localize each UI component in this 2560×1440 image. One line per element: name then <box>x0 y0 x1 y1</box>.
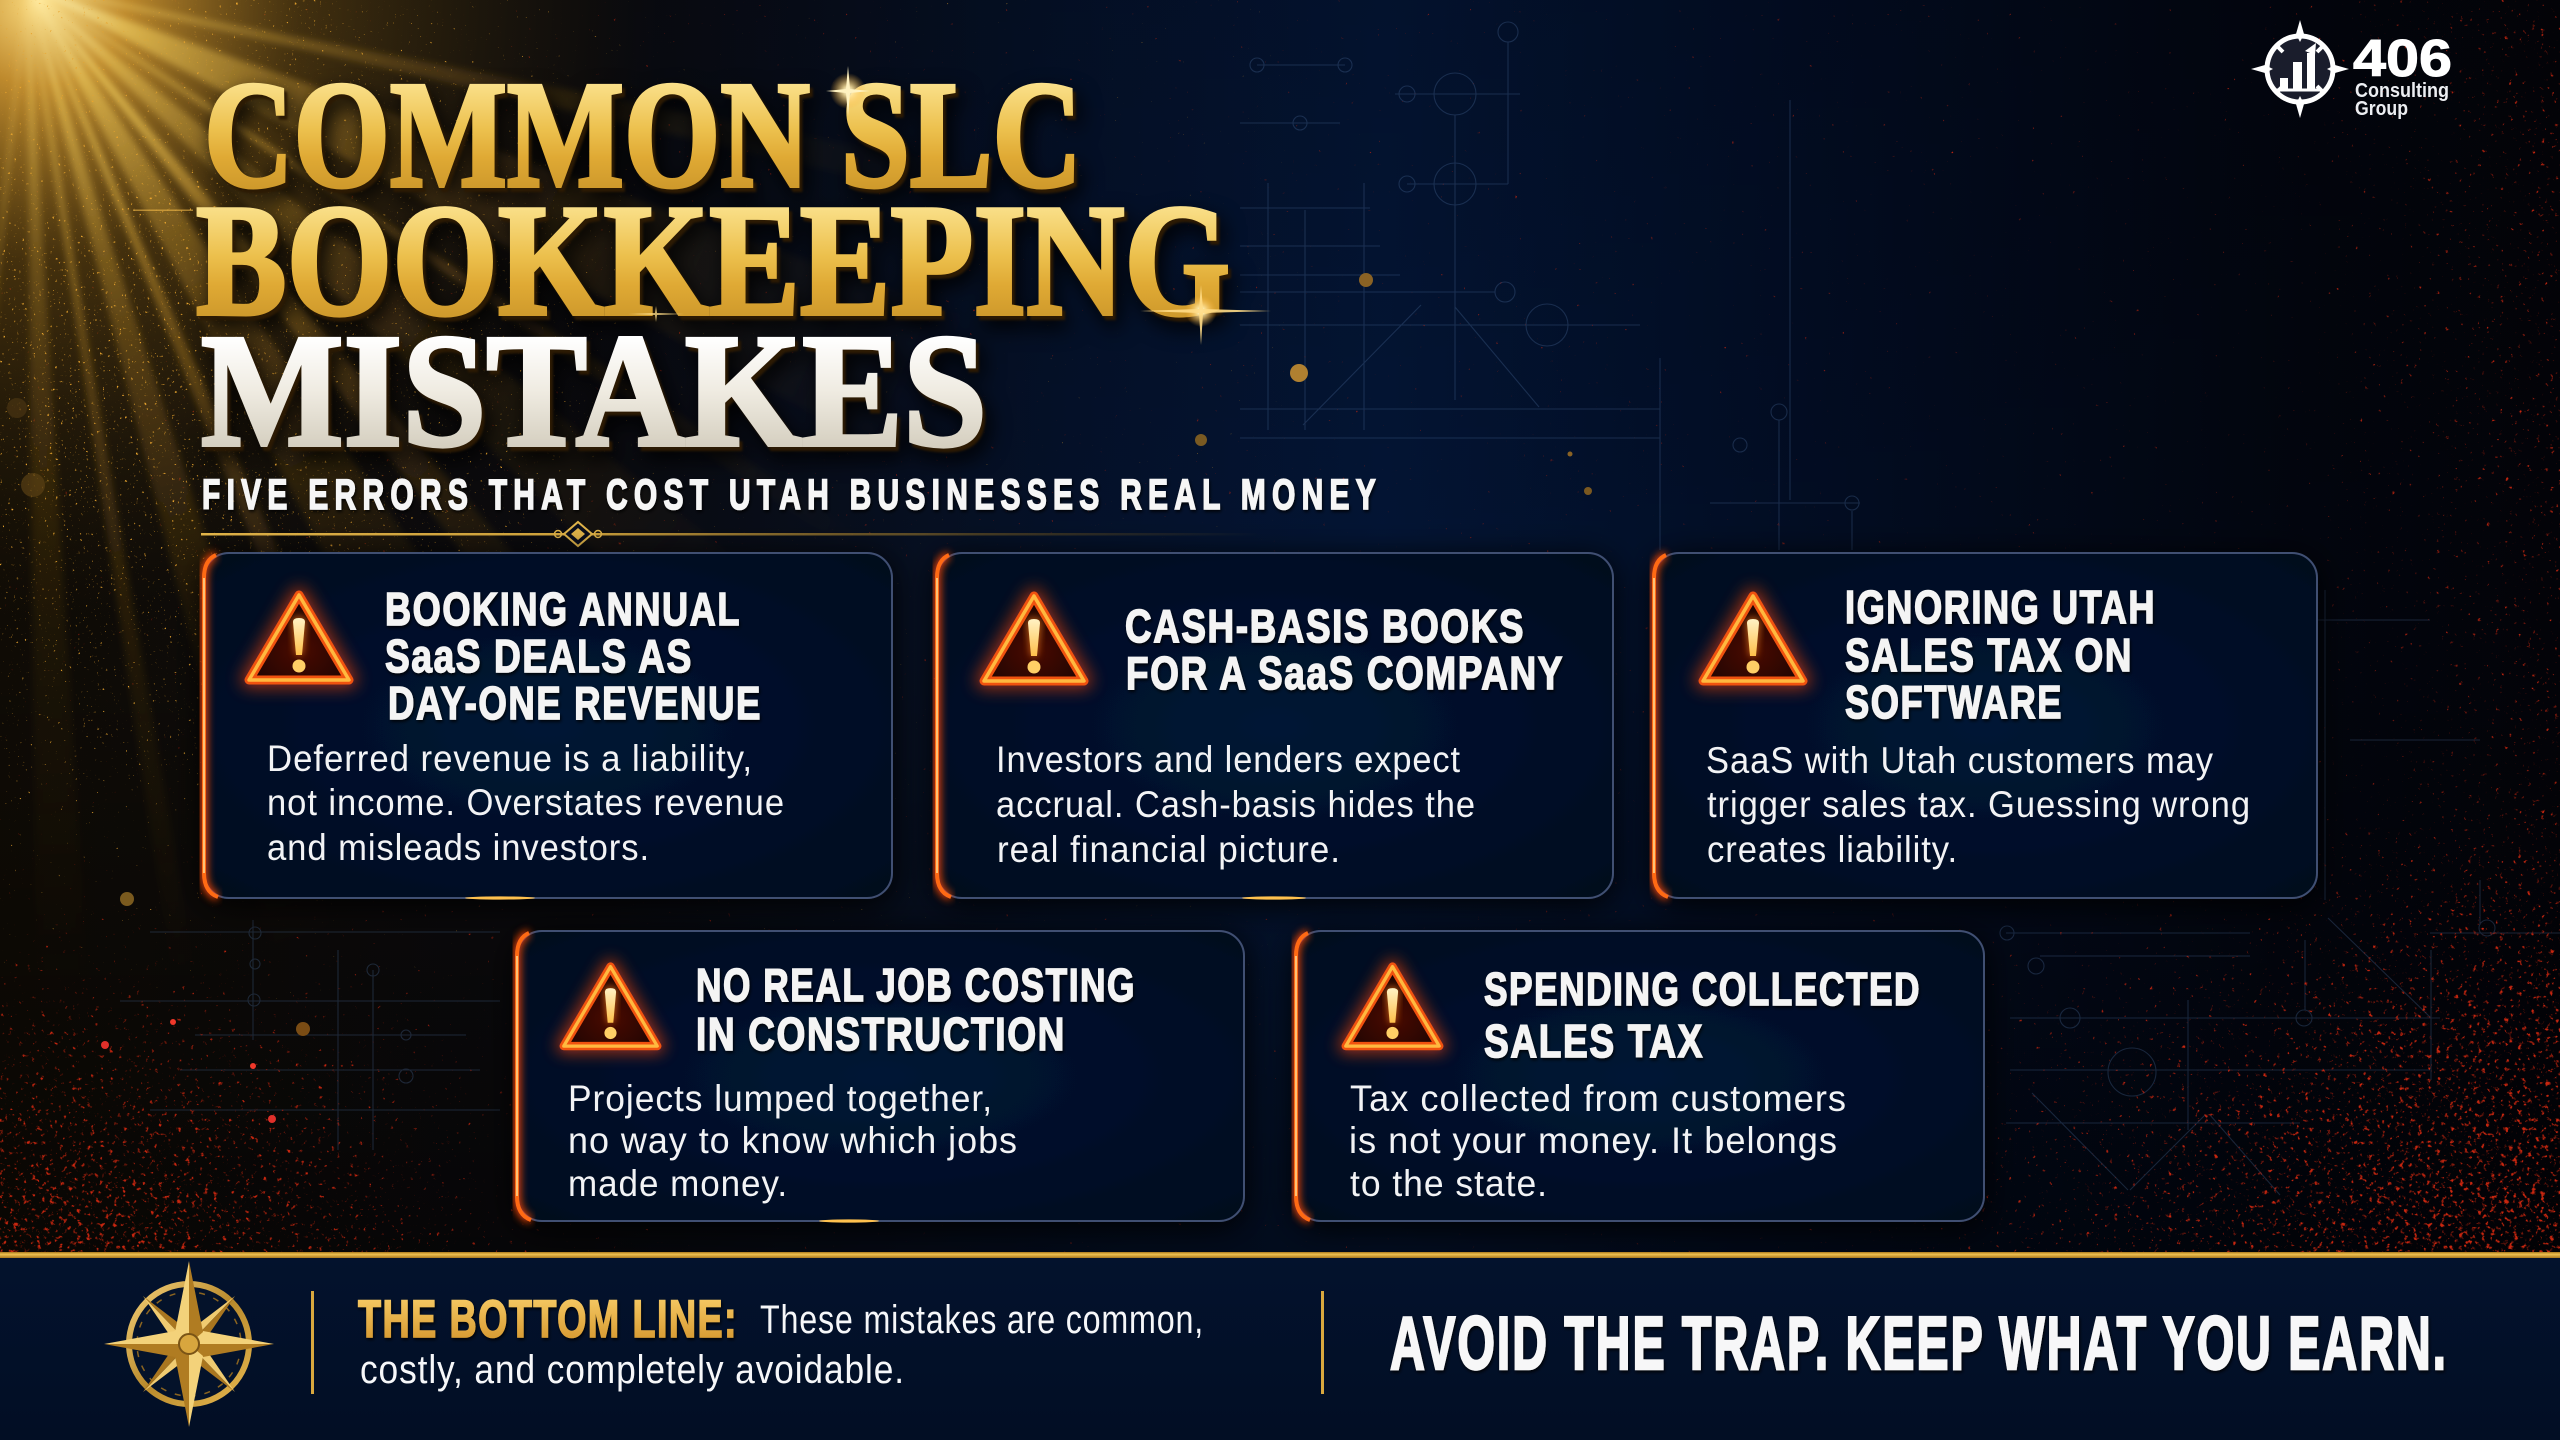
body text: to the state. <box>1350 1163 1548 1204</box>
heading: SPENDING COLLECTED <box>1484 963 1921 1015</box>
title: MISTAKES <box>201 302 987 481</box>
body text: not income. Overstates revenue <box>267 782 785 823</box>
heading <box>385 583 762 729</box>
bottom line text <box>358 1290 1204 1392</box>
bottom banner <box>0 1252 2560 1440</box>
gold coin bokeh dots <box>7 273 1592 1123</box>
heading: NO REAL JOB COSTING <box>696 959 1136 1011</box>
body text <box>1706 740 2251 870</box>
title: COMMON SLC <box>204 51 1082 220</box>
panel: spending collected sales tax <box>1296 931 1984 1221</box>
title sparkles <box>133 66 1272 345</box>
subtitle ornament divider <box>201 522 1261 546</box>
body text: creates liability. <box>1707 829 1958 870</box>
subtitle: FIVE ERRORS THAT COST UTAH BUSINESSES REAL MONEY <box>202 471 1382 519</box>
heading <box>1484 963 1921 1067</box>
body text: Tax collected from customers <box>1350 1078 1847 1119</box>
body text: is not your money. It belongs <box>1349 1120 1838 1161</box>
body text <box>568 1078 1018 1204</box>
icon: warning triangle <box>564 967 657 1046</box>
logo: 406 Consulting Group <box>2251 20 2452 120</box>
body text <box>267 738 785 868</box>
logo: 406 Consulting Group: Group <box>2355 98 2408 120</box>
bottom line text: These mistakes are common, <box>760 1298 1204 1342</box>
panel: ignoring Utah sales tax <box>1654 553 2317 898</box>
heading: SALES TAX ON <box>1845 629 2133 681</box>
heading: IGNORING UTAH <box>1845 581 2156 633</box>
heading: FOR A SaaS COMPANY <box>1126 647 1564 699</box>
icon: warning triangle <box>1346 967 1439 1046</box>
body text: Projects lumped together, <box>568 1078 993 1119</box>
body text <box>996 739 1476 870</box>
panel: booking annual SaaS deals <box>204 553 892 900</box>
bottom line text: THE BOTTOM LINE: <box>358 1290 738 1349</box>
body text: made money. <box>568 1163 788 1204</box>
golden light rays top left <box>0 0 1300 1000</box>
heading: SALES TAX <box>1484 1015 1704 1067</box>
body text: SaaS with Utah customers may <box>1706 740 2214 781</box>
panel: cash-basis books <box>937 553 1613 900</box>
title: BOOKKEEPING <box>196 171 1230 349</box>
logo: 406 Consulting Group: 406 <box>2353 30 2452 88</box>
body text: and misleads investors. <box>267 827 650 868</box>
title <box>133 51 1272 481</box>
body text: Deferred revenue is a liability, <box>267 738 753 779</box>
body text: trigger sales tax. Guessing wrong <box>1707 784 2251 825</box>
icon: warning triangle <box>249 595 349 680</box>
body text <box>1349 1078 1847 1204</box>
bottom line text: costly, and completely avoidable. <box>360 1348 905 1392</box>
heading <box>1845 581 2156 728</box>
heading: IN CONSTRUCTION <box>696 1008 1066 1060</box>
icon: warning triangle <box>1703 596 1803 681</box>
body text: accrual. Cash-basis hides the <box>996 784 1476 825</box>
heading <box>1125 600 1564 699</box>
body text: real financial picture. <box>997 829 1341 870</box>
heading: BOOKING ANNUAL <box>385 583 741 635</box>
panel: no real job costing <box>517 931 1244 1223</box>
heading: DAY-ONE REVENUE <box>388 677 762 729</box>
heading: SaaS DEALS AS <box>385 630 693 682</box>
body text: Investors and lenders expect <box>996 739 1461 780</box>
heading <box>696 959 1136 1060</box>
icon: warning triangle <box>984 596 1084 681</box>
heading: SOFTWARE <box>1845 676 2063 728</box>
icon: compass chart emblem <box>2251 20 2349 118</box>
icon: gold compass rose <box>104 1261 274 1427</box>
logo: 406 Consulting Group: Consulting <box>2355 80 2449 102</box>
body text: no way to know which jobs <box>568 1120 1018 1161</box>
heading: CASH-BASIS BOOKS <box>1125 600 1525 652</box>
blueprint schematic background lines <box>120 22 2560 1195</box>
